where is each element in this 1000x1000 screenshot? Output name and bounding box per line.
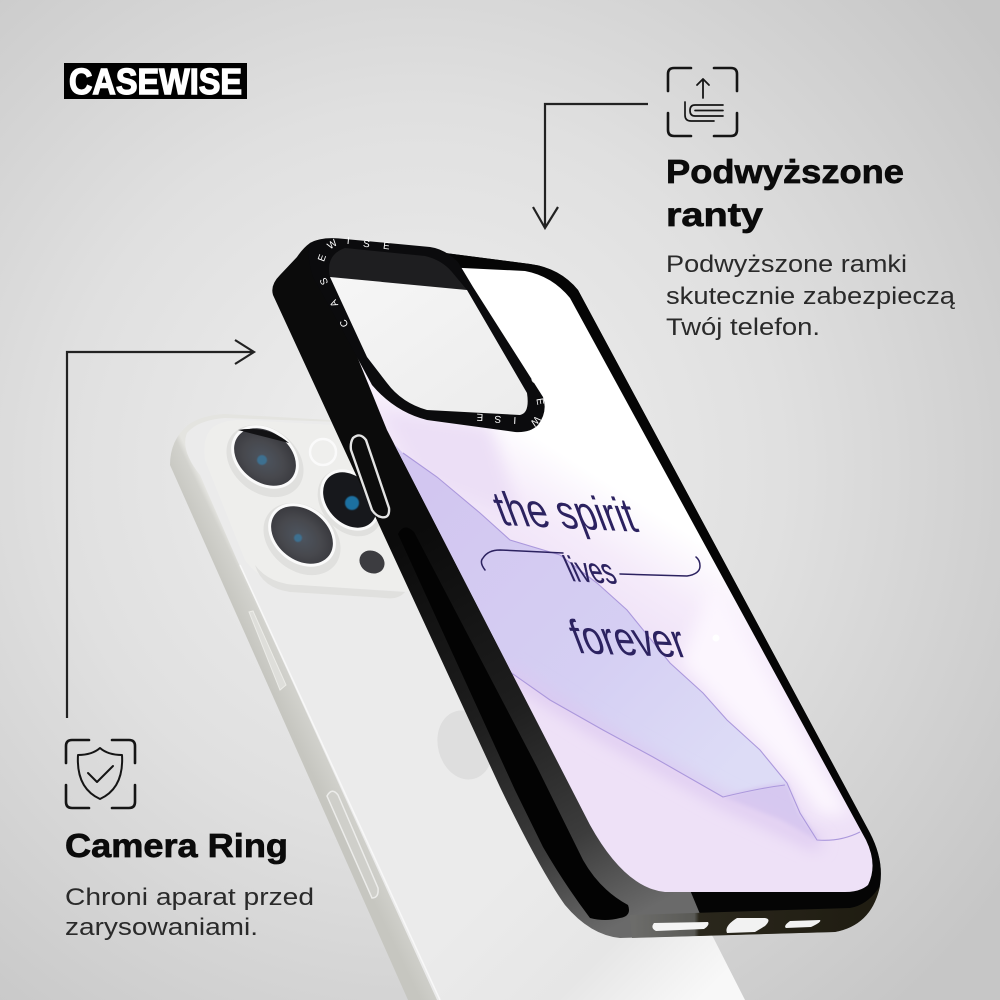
ring lettering: S bbox=[362, 239, 371, 250]
quote: forever: forever bbox=[561, 610, 694, 668]
side inner channel bbox=[398, 527, 629, 920]
periwinkle wash bbox=[390, 440, 790, 797]
camera ring bbox=[309, 236, 546, 432]
mic port bbox=[785, 920, 820, 928]
heading: raised edges: ranty bbox=[666, 196, 764, 233]
ring lettering: I bbox=[513, 414, 517, 425]
ring lettering: S bbox=[494, 413, 501, 424]
ring lettering: W bbox=[527, 413, 542, 428]
quote flourish bbox=[481, 550, 700, 576]
lens: top bbox=[212, 410, 318, 512]
ring lettering: W bbox=[326, 237, 340, 252]
ring lettering bbox=[316, 236, 546, 428]
pale wash near right edge bbox=[680, 580, 850, 815]
flash bbox=[310, 439, 336, 465]
heading: raised edges: Podwyższone bbox=[666, 153, 904, 190]
bottom ports bbox=[652, 918, 820, 933]
case body bbox=[272, 239, 881, 938]
side button bbox=[327, 791, 378, 898]
lens: right bbox=[304, 457, 396, 549]
ring outer bbox=[309, 238, 545, 432]
darker purple veins bbox=[403, 453, 860, 840]
camera plate bbox=[204, 420, 420, 592]
ring lettering: I bbox=[346, 236, 350, 247]
ring inner wall bbox=[329, 248, 467, 290]
rim highlight line bbox=[240, 565, 440, 1000]
quote: lives: lives bbox=[558, 550, 623, 592]
lens: bottom bbox=[249, 488, 355, 590]
ring lettering: E bbox=[382, 241, 391, 252]
ring lettering: S bbox=[528, 374, 541, 386]
ring lettering: A bbox=[518, 354, 531, 366]
arrow: to camera ring bbox=[67, 340, 254, 718]
brand logo: CASEWISE bbox=[69, 61, 242, 102]
purple tail bbox=[729, 783, 814, 838]
ring lettering: C bbox=[338, 317, 351, 329]
volume button bbox=[249, 611, 286, 690]
bottom face bbox=[630, 886, 880, 938]
usb port bbox=[726, 918, 768, 933]
panel base tint bbox=[358, 268, 873, 892]
icon: shield bbox=[66, 740, 135, 808]
pale dot bbox=[712, 634, 720, 642]
phone side rim bbox=[170, 414, 745, 1000]
lower shade beneath vein bbox=[503, 670, 820, 845]
text: raised edges description: Podwyższone ramki bbox=[666, 251, 907, 278]
ring lettering: E bbox=[533, 397, 546, 406]
text: raised edges description: Twój telefon. bbox=[666, 314, 820, 341]
white phone rear bbox=[170, 410, 745, 1000]
arrow: to raised edges bbox=[533, 104, 648, 228]
ring lettering: A bbox=[328, 297, 341, 308]
upper left lilac wash bbox=[380, 412, 508, 504]
upper and right case black bbox=[345, 240, 881, 914]
ring lettering: C bbox=[506, 330, 519, 342]
heading: camera ring: Camera Ring bbox=[65, 827, 288, 864]
black protective case bbox=[272, 239, 881, 938]
apple logo bbox=[430, 704, 500, 786]
sensor bbox=[355, 546, 389, 578]
ring lettering: S bbox=[318, 275, 331, 286]
ring lettering: E bbox=[316, 253, 329, 263]
text: camera ring description: zarysowaniami. bbox=[65, 914, 258, 941]
text: camera ring description: Chroni aparat przed bbox=[65, 884, 314, 911]
power button pill bbox=[351, 435, 389, 517]
phone back surface bbox=[185, 418, 745, 1000]
ring opening bbox=[330, 277, 528, 415]
text: camera ring description bbox=[65, 884, 314, 941]
quote: the spirit: the spirit bbox=[485, 482, 644, 543]
speaker port bbox=[652, 922, 708, 931]
text: raised edges description bbox=[666, 251, 956, 341]
text: raised edges description: skutecznie zabezpieczą bbox=[666, 283, 956, 310]
icon: raised edges bbox=[668, 68, 737, 136]
ring lettering: E bbox=[476, 411, 483, 422]
case back panel artwork bbox=[358, 268, 873, 892]
camera plate lower shade bbox=[255, 565, 405, 598]
heading: raised edges bbox=[666, 153, 904, 233]
